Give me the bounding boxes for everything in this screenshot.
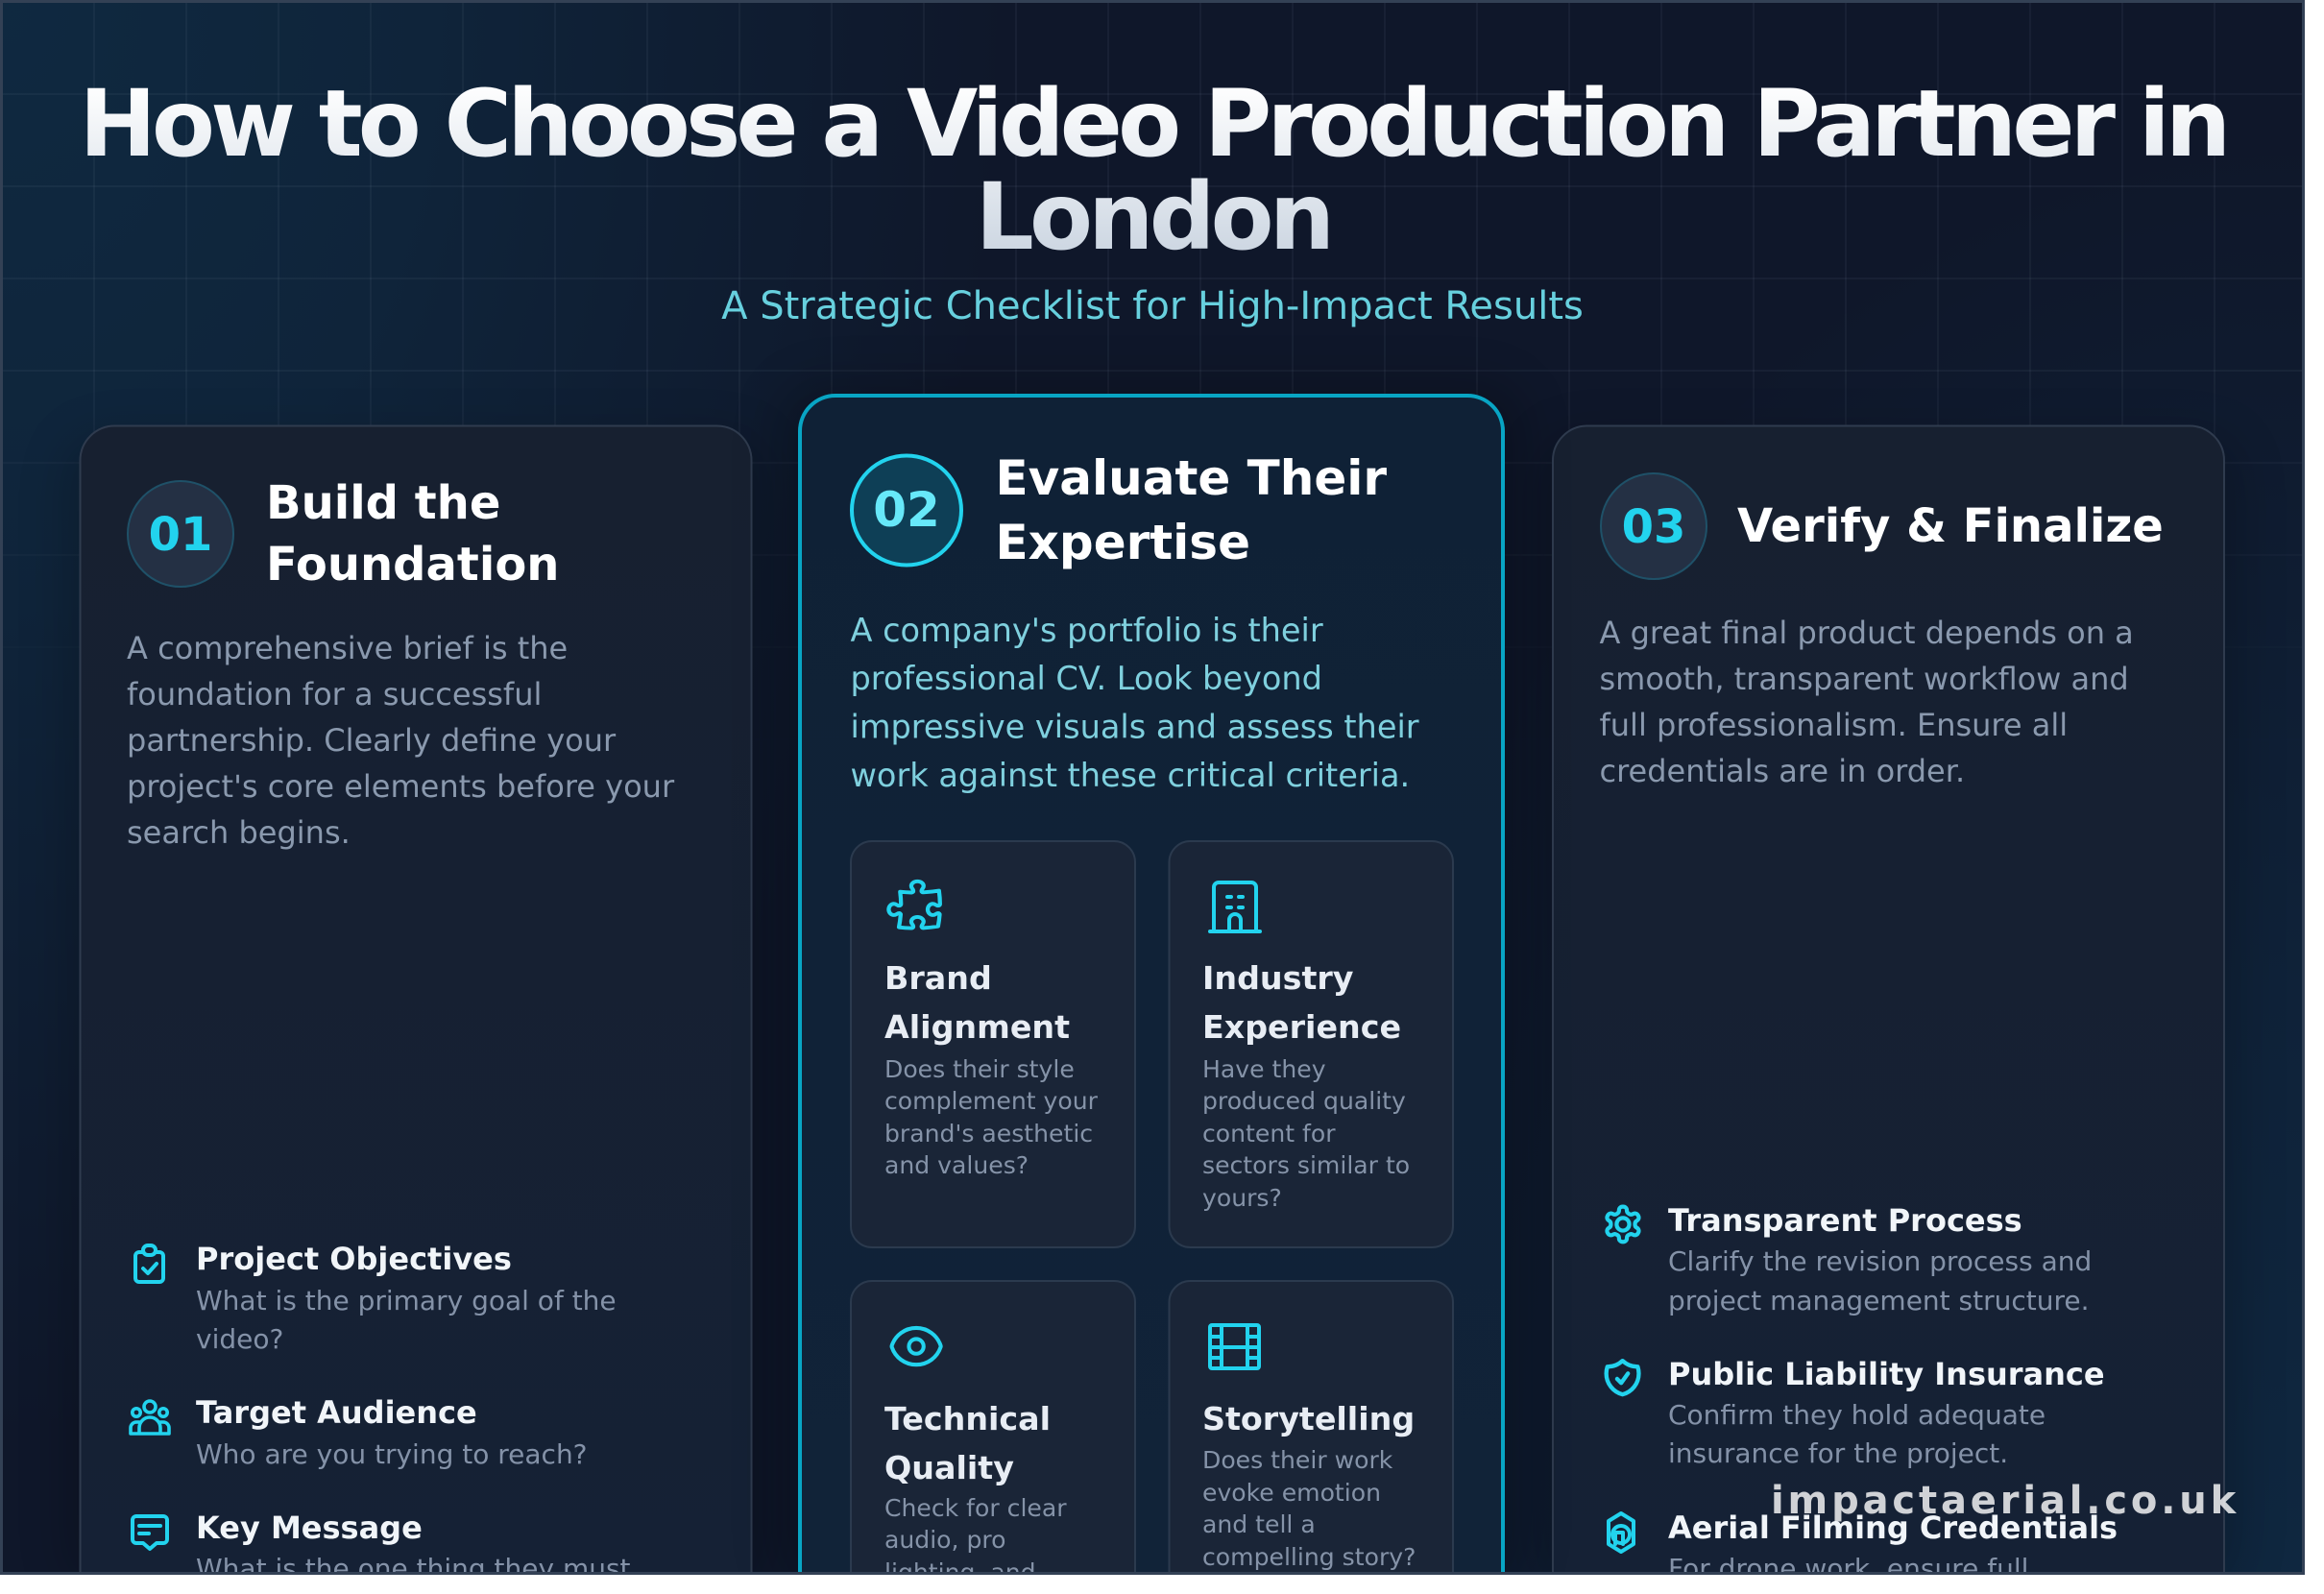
card: industry experience: content for	[1202, 1120, 1336, 1147]
card: storytelling	[1170, 1281, 1453, 1575]
panel: step 01 build the foundation	[67, 426, 764, 1589]
item: project objectives	[135, 1241, 617, 1355]
card: brand alignment: brand's aesthetic	[884, 1120, 1093, 1147]
number badge 03: 03	[1622, 500, 1685, 554]
panel: step 03 verify and finalize	[1540, 426, 2238, 1589]
item: project objectives: video?	[196, 1323, 283, 1355]
card: storytelling: compelling story?	[1202, 1543, 1416, 1571]
description: partnership. Clearly define your	[127, 722, 617, 759]
icon: eye	[892, 1328, 941, 1365]
card: brand alignment: Alignment	[884, 1008, 1070, 1046]
card: industry experience: Have they	[1202, 1055, 1326, 1083]
number badge 02: 02	[873, 482, 940, 538]
number badge 01: 01	[149, 508, 212, 562]
card: industry experience: produced quality	[1202, 1087, 1406, 1115]
description: impressive visuals and assess their	[851, 709, 1419, 745]
card: technical quality: Technical	[884, 1400, 1051, 1437]
description: foundation for a successful	[127, 676, 542, 712]
card: industry experience: Experience	[1202, 1008, 1401, 1046]
description: project's core elements before your	[127, 768, 675, 805]
subtitle: A Strategic Checklist for High-Impact Results	[721, 284, 1584, 328]
heading: Foundation	[266, 538, 559, 592]
item: project objectives: Project Objectives	[196, 1241, 512, 1277]
card: brand alignment: complement your	[884, 1087, 1099, 1115]
description: professional CV. Look beyond	[851, 660, 1322, 697]
icon: building	[1210, 882, 1260, 931]
item: public liability insurance: Public Liability Insurance	[1668, 1356, 2105, 1392]
card: industry experience: sectors similar to	[1202, 1151, 1410, 1179]
icon: drone badge	[1609, 1513, 1634, 1552]
item: key message	[133, 1509, 631, 1584]
heading: Evaluate Their	[995, 450, 1387, 506]
title: How to Choose a Video Production Partner in	[80, 70, 2226, 178]
card: technical quality: audio, pro	[884, 1526, 1006, 1554]
item: transparent process: Transparent Process	[1668, 1202, 2022, 1239]
card: storytelling: evoke emotion	[1202, 1479, 1381, 1507]
item: transparent process: project management structure.	[1668, 1285, 2090, 1316]
number badge 03	[1601, 473, 1707, 579]
icon: puzzle piece	[888, 882, 940, 929]
card: industry experience: Industry	[1202, 959, 1354, 997]
description: A comprehensive brief is the	[127, 630, 568, 666]
heading: Build the	[266, 476, 500, 530]
item: public liability insurance: insurance for the project.	[1668, 1437, 2008, 1469]
card: brand alignment: Brand	[884, 959, 992, 997]
heading: Expertise	[995, 515, 1250, 570]
description: A great final product depends on a	[1600, 615, 2134, 651]
icon: shield check	[1607, 1361, 1638, 1394]
icon: chat bubble	[133, 1516, 167, 1549]
description: credentials are in order.	[1600, 753, 1965, 789]
icon: people	[131, 1401, 169, 1434]
title: London	[976, 163, 1330, 271]
item: project objectives: What is the primary goal of the	[196, 1285, 617, 1316]
card: brand alignment	[851, 841, 1135, 1247]
description: full professionalism. Ensure all	[1600, 707, 2068, 743]
card: technical quality: Quality	[884, 1449, 1014, 1486]
card: industry experience	[1170, 841, 1453, 1247]
card: brand alignment: and values?	[884, 1151, 1029, 1179]
item: aerial filming credentials	[1609, 1509, 2118, 1584]
icon: gear	[1607, 1207, 1638, 1242]
description: search begins.	[127, 814, 351, 851]
heading: Verify & Finalize	[1737, 499, 2164, 553]
title	[80, 70, 2226, 271]
description: A company's portfolio is their	[851, 612, 1323, 649]
card: storytelling: and tell a	[1202, 1510, 1316, 1538]
item: target audience: Who are you trying to reach?	[196, 1438, 588, 1470]
card: technical quality	[851, 1281, 1135, 1586]
card: industry experience: yours?	[1202, 1184, 1282, 1212]
icon: clipboard check	[135, 1245, 163, 1282]
item: target audience: Target Audience	[196, 1394, 477, 1431]
number badge 02	[852, 455, 961, 565]
description: smooth, transparent workflow and	[1600, 661, 2129, 697]
panel: step 02 evaluate their expertise (highlighted)	[780, 384, 1523, 1589]
item: public liability insurance	[1607, 1356, 2105, 1469]
card: technical quality: Check for clear	[884, 1494, 1067, 1522]
icon: film strip	[1210, 1325, 1259, 1368]
description: work against these critical criteria.	[851, 757, 1410, 794]
item: key message: Key Message	[196, 1509, 423, 1546]
card: storytelling: Storytelling	[1202, 1400, 1415, 1437]
item: target audience	[131, 1394, 588, 1470]
card: brand alignment: Does their style	[884, 1055, 1075, 1083]
item: transparent process: Clarify the revision process and	[1668, 1245, 2092, 1277]
item: aerial filming credentials: Aerial Filming Credentials	[1668, 1509, 2118, 1546]
item: public liability insurance: Confirm they hold adequate	[1668, 1399, 2046, 1431]
watermark: impactaerial.co.uk	[1771, 1479, 2239, 1523]
item: transparent process	[1607, 1202, 2092, 1316]
card: storytelling: Does their work	[1202, 1446, 1393, 1474]
number badge 01	[128, 481, 233, 587]
